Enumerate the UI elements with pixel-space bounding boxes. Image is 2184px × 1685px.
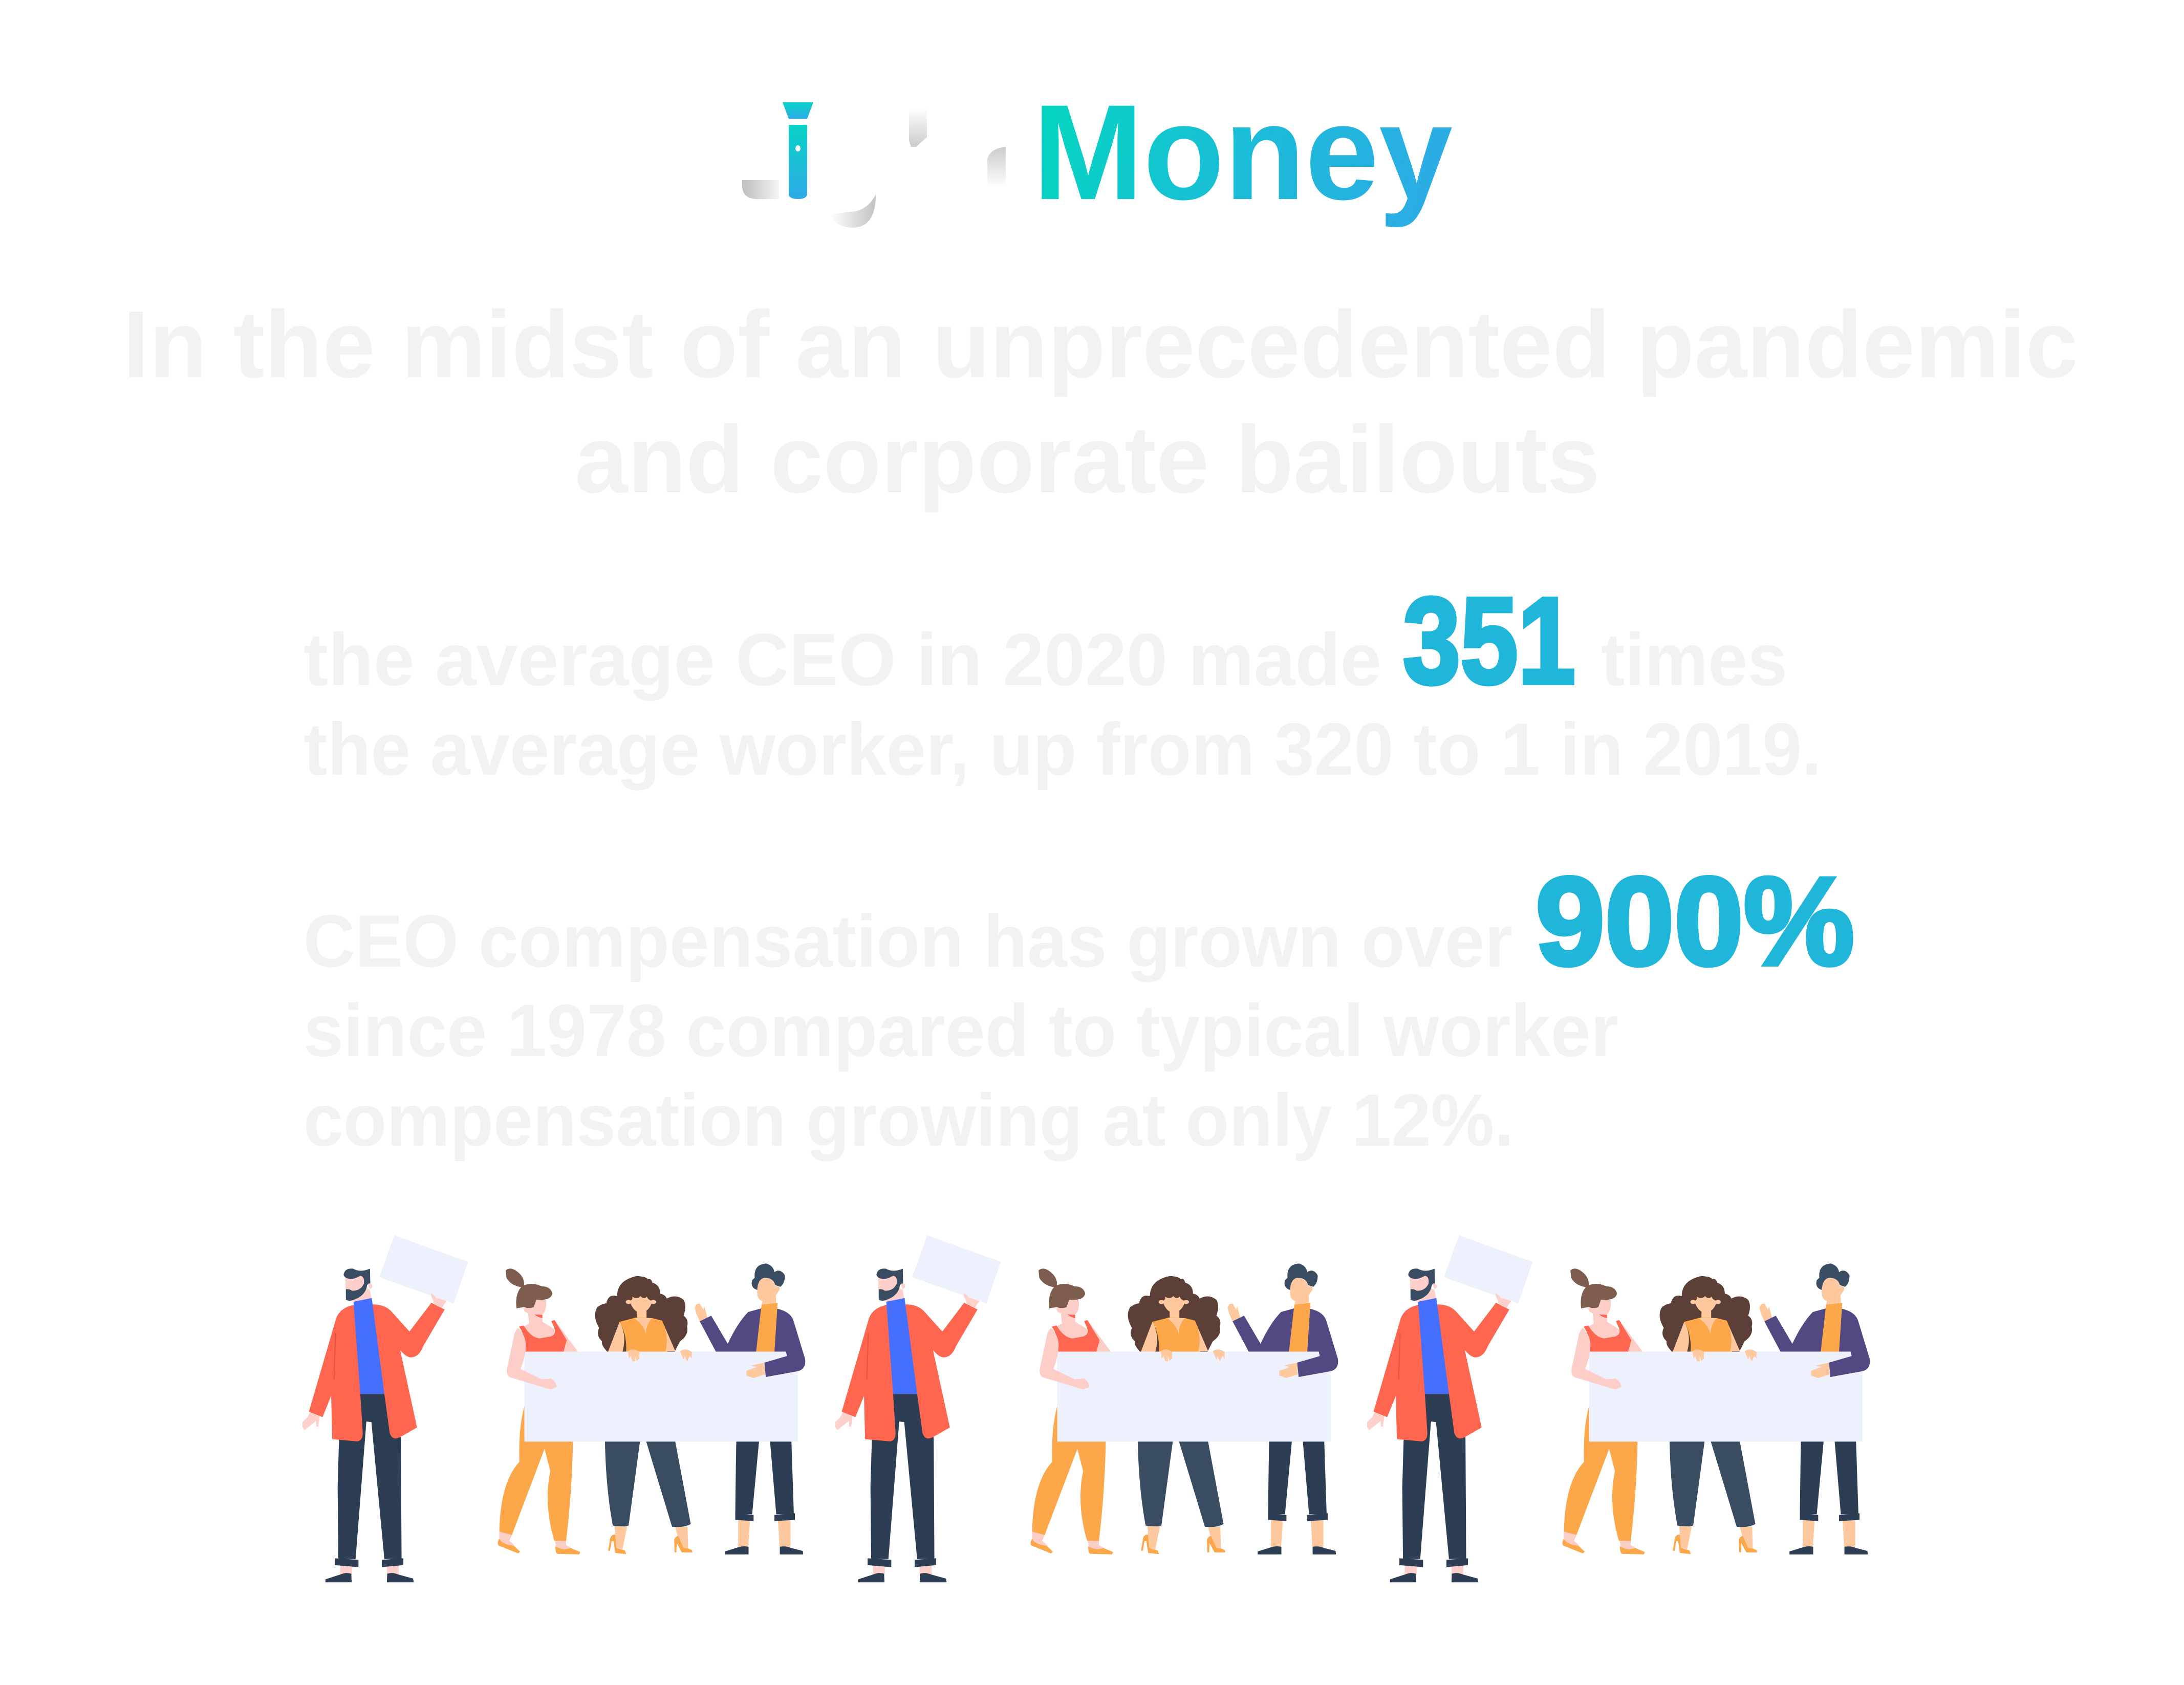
illustration: man with sign 2 [835, 1235, 1001, 1582]
illustration: three people with banner 3 [1563, 1263, 1870, 1555]
statistic: 900% [304, 851, 1854, 1162]
illustration: man with sign 3 [1367, 1235, 1532, 1582]
statistic: 900%: CEO compensation has grown over [304, 900, 1512, 982]
logo [742, 77, 1454, 229]
logo word: Light (white): Light [742, 77, 1029, 229]
title: In the midst of an unprecedented pandemic [123, 292, 2078, 398]
big number: 900%: 900% [1536, 851, 1854, 991]
big number: 351: 351 [1403, 572, 1575, 709]
statistic: 351 times [304, 572, 1822, 791]
statistic: 351 times: times [1601, 618, 1787, 701]
title [123, 292, 2078, 513]
illustration: man with sign 1 [302, 1235, 468, 1582]
icon: flashlight letter i [783, 102, 813, 199]
illustration: three people with banner 1 [498, 1263, 805, 1555]
logo word: Money: Money [1033, 77, 1454, 229]
statistic: 351 times: the average CEO in 2020 made [304, 618, 1381, 701]
statistic: 900%: since 1978 compared to typical worker [304, 989, 1618, 1072]
statistic: 900%: compensation growing at only 12%. [304, 1079, 1514, 1162]
statistic: 351 times: the average worker, up from 320 to 1 in 2019. [304, 708, 1822, 791]
illustration: three people with banner 2 [1031, 1263, 1338, 1555]
logo shadow fragments [742, 107, 1006, 228]
title: and corporate bailouts [575, 407, 1600, 513]
